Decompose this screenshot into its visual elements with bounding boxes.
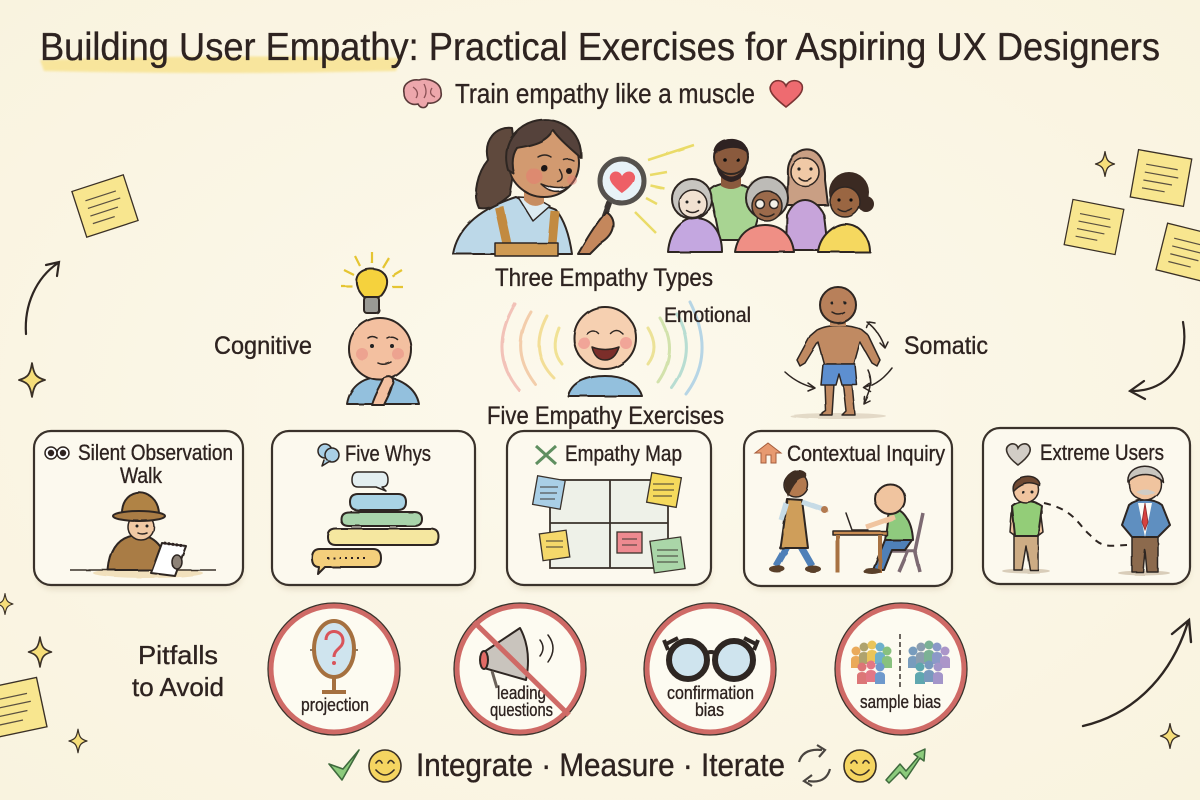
decoration: lower right arrow and star <box>1083 620 1191 748</box>
user at desk with laptop <box>833 484 923 574</box>
pitfall: confirmation bias: confirmation <box>667 683 754 703</box>
icon: cycle arrows <box>799 745 830 786</box>
icon: brain <box>404 79 441 108</box>
title highlighter <box>40 56 400 73</box>
curved arrow <box>1130 322 1184 399</box>
arrow up <box>26 262 59 334</box>
icon: smiley <box>369 750 401 782</box>
heading: pitfalls to avoid: Pitfalls <box>138 640 218 670</box>
interviewer <box>769 470 828 572</box>
decoration: lower left stars and note <box>0 594 87 753</box>
dashed connector <box>1044 503 1127 546</box>
icon: glasses <box>664 638 758 679</box>
closing line: integrate measure iterate: Integrate · Measure · Iterate <box>416 747 785 783</box>
exercise card: silent observation walk <box>34 431 243 585</box>
pitfall: leading questions: questions <box>490 700 553 720</box>
exercise card: extreme users: Extreme Users <box>1040 440 1164 465</box>
exercise card: silent observation walk: Walk <box>120 463 163 488</box>
pitfall: leading questions <box>454 603 586 735</box>
closing line: integrate measure iterate <box>329 745 925 786</box>
young user <box>1002 476 1050 574</box>
icon: smiley <box>844 750 876 782</box>
stacked speech bubbles <box>312 472 439 574</box>
man in green <box>710 139 760 240</box>
magnifying glass with heart <box>578 159 644 254</box>
icon: growth arrow <box>886 749 925 783</box>
exercise card: extreme users <box>983 428 1190 584</box>
icon: house <box>755 443 781 463</box>
icon: megaphone <box>480 628 553 688</box>
exercise card: five whys <box>272 431 475 585</box>
type: somatic <box>785 287 988 419</box>
exercise card: contextual inquiry <box>744 431 952 586</box>
type: cognitive: Cognitive <box>214 332 312 360</box>
icon: lightbulb <box>341 252 403 313</box>
rays <box>635 145 694 233</box>
type: emotional <box>502 302 751 396</box>
heading: pitfalls to avoid: to Avoid <box>132 672 224 702</box>
icon: grey heart <box>1007 444 1030 465</box>
exercise card: empathy map: Empathy Map <box>565 441 682 466</box>
icon: heart <box>770 81 802 107</box>
icon: two crowds <box>851 634 950 688</box>
pitfall: confirmation bias <box>644 603 776 735</box>
exercise card: empathy map <box>507 431 711 585</box>
decoration: left sticky note and arrow <box>19 175 138 397</box>
type: emotional: Emotional <box>664 304 751 327</box>
exercise card: five whys: Five Whys <box>345 441 431 466</box>
exercise card: silent observation walk: Silent Observation <box>78 440 233 465</box>
woman in purple <box>786 149 828 250</box>
pitfall: projection <box>268 603 400 735</box>
type: cognitive <box>214 252 419 405</box>
icon: eyes <box>45 447 69 459</box>
hero illustration: designer with magnifier and users <box>453 120 874 256</box>
icon: mirror <box>310 621 358 692</box>
card shadows <box>36 435 1190 590</box>
decoration: right sticky notes, star, arrow <box>1064 150 1200 399</box>
pitfall: leading questions: leading <box>497 683 546 703</box>
pitfall: projection: projection <box>301 695 369 715</box>
heading: three empathy types: Three Empathy Types <box>495 264 713 292</box>
pitfall: sample bias <box>835 603 967 735</box>
type: somatic: Somatic <box>904 332 988 360</box>
detective with notepad <box>70 493 216 578</box>
map grid and sticky notes <box>533 473 685 573</box>
child in yellow <box>818 172 874 252</box>
heading: pitfalls to avoid <box>132 640 224 702</box>
pitfall: sample bias: sample bias <box>860 692 941 712</box>
figure with body arrows <box>785 287 892 419</box>
older user <box>1118 466 1170 576</box>
icon: tools <box>536 446 556 464</box>
star <box>19 363 45 397</box>
subtitle with brain and heart: Train empathy like a muscle <box>455 78 755 109</box>
heading: five empathy exercises: Five Empathy Exercises <box>487 402 724 430</box>
figure thinking with lightbulb <box>341 252 419 405</box>
icon: speech bubbles <box>318 444 339 466</box>
prohibition stroke <box>474 622 569 715</box>
grandmother with glasses <box>735 177 794 252</box>
figure radiating feelings <box>502 302 702 396</box>
designer <box>453 120 581 256</box>
icon: check mark <box>329 750 359 780</box>
pitfall: confirmation bias: bias <box>695 700 724 720</box>
grandmother left <box>668 179 722 252</box>
exercise card: contextual inquiry: Contextual Inquiry <box>787 441 945 466</box>
